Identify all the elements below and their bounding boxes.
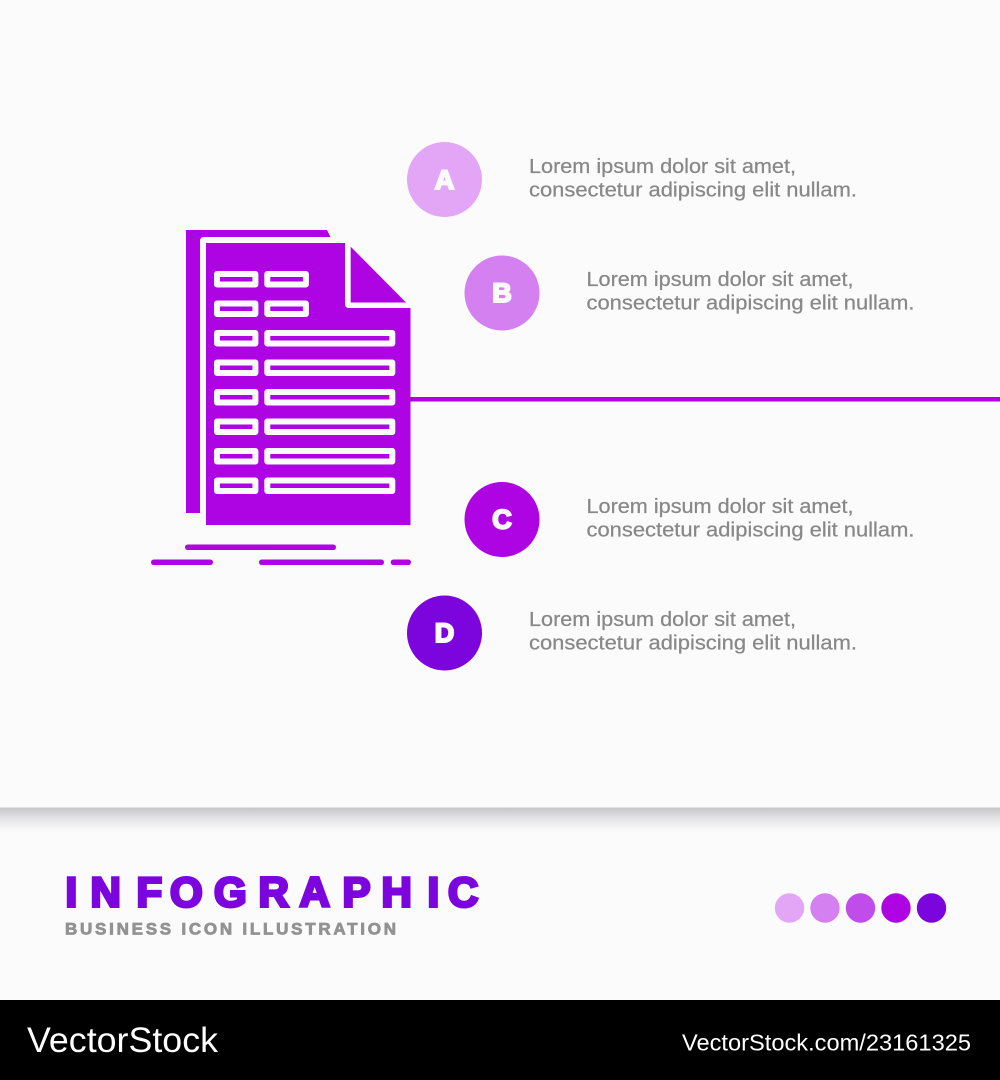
step D (407, 596, 857, 670)
text D: consectetur adipiscing elit nullam. (529, 632, 857, 654)
title: INFOGRAPHIC (66, 868, 478, 916)
icon: back sheet (186, 230, 330, 513)
text D: Lorem ipsum dolor sit amet, (529, 609, 796, 631)
text C: consectetur adipiscing elit nullam. (586, 520, 914, 542)
icon: front sheet (206, 243, 410, 525)
badge D: D (435, 618, 454, 648)
text B: consectetur adipiscing elit nullam. (586, 292, 914, 314)
watermark logo: VectorStock (27, 1021, 219, 1060)
footer shadow band (0, 808, 1000, 830)
step B (464, 256, 914, 330)
badge C (464, 482, 540, 557)
badge A (407, 142, 482, 217)
icon: folded corner (351, 247, 406, 302)
icon: spreadsheet document (151, 230, 411, 565)
text A: Lorem ipsum dolor sit amet, (529, 156, 796, 178)
watermark bar (0, 1000, 1000, 1080)
step A (407, 142, 857, 217)
text A: consectetur adipiscing elit nullam. (529, 180, 857, 202)
text B: Lorem ipsum dolor sit amet, (586, 269, 854, 291)
badge A: A (435, 165, 454, 195)
badge B: B (492, 278, 512, 308)
icon: ground lines (151, 544, 411, 565)
badge B (464, 256, 540, 330)
palette dots (775, 893, 946, 923)
text C: Lorem ipsum dolor sit amet, (586, 496, 854, 518)
badge D (407, 596, 482, 670)
icon: table rows (217, 274, 392, 491)
step C (464, 482, 914, 557)
badge C: C (492, 504, 512, 534)
connector line (408, 397, 1000, 402)
watermark id: VectorStock.com/23161325 (682, 1030, 971, 1056)
subtitle: BUSINESS ICON ILLUSTRATION (65, 920, 396, 939)
